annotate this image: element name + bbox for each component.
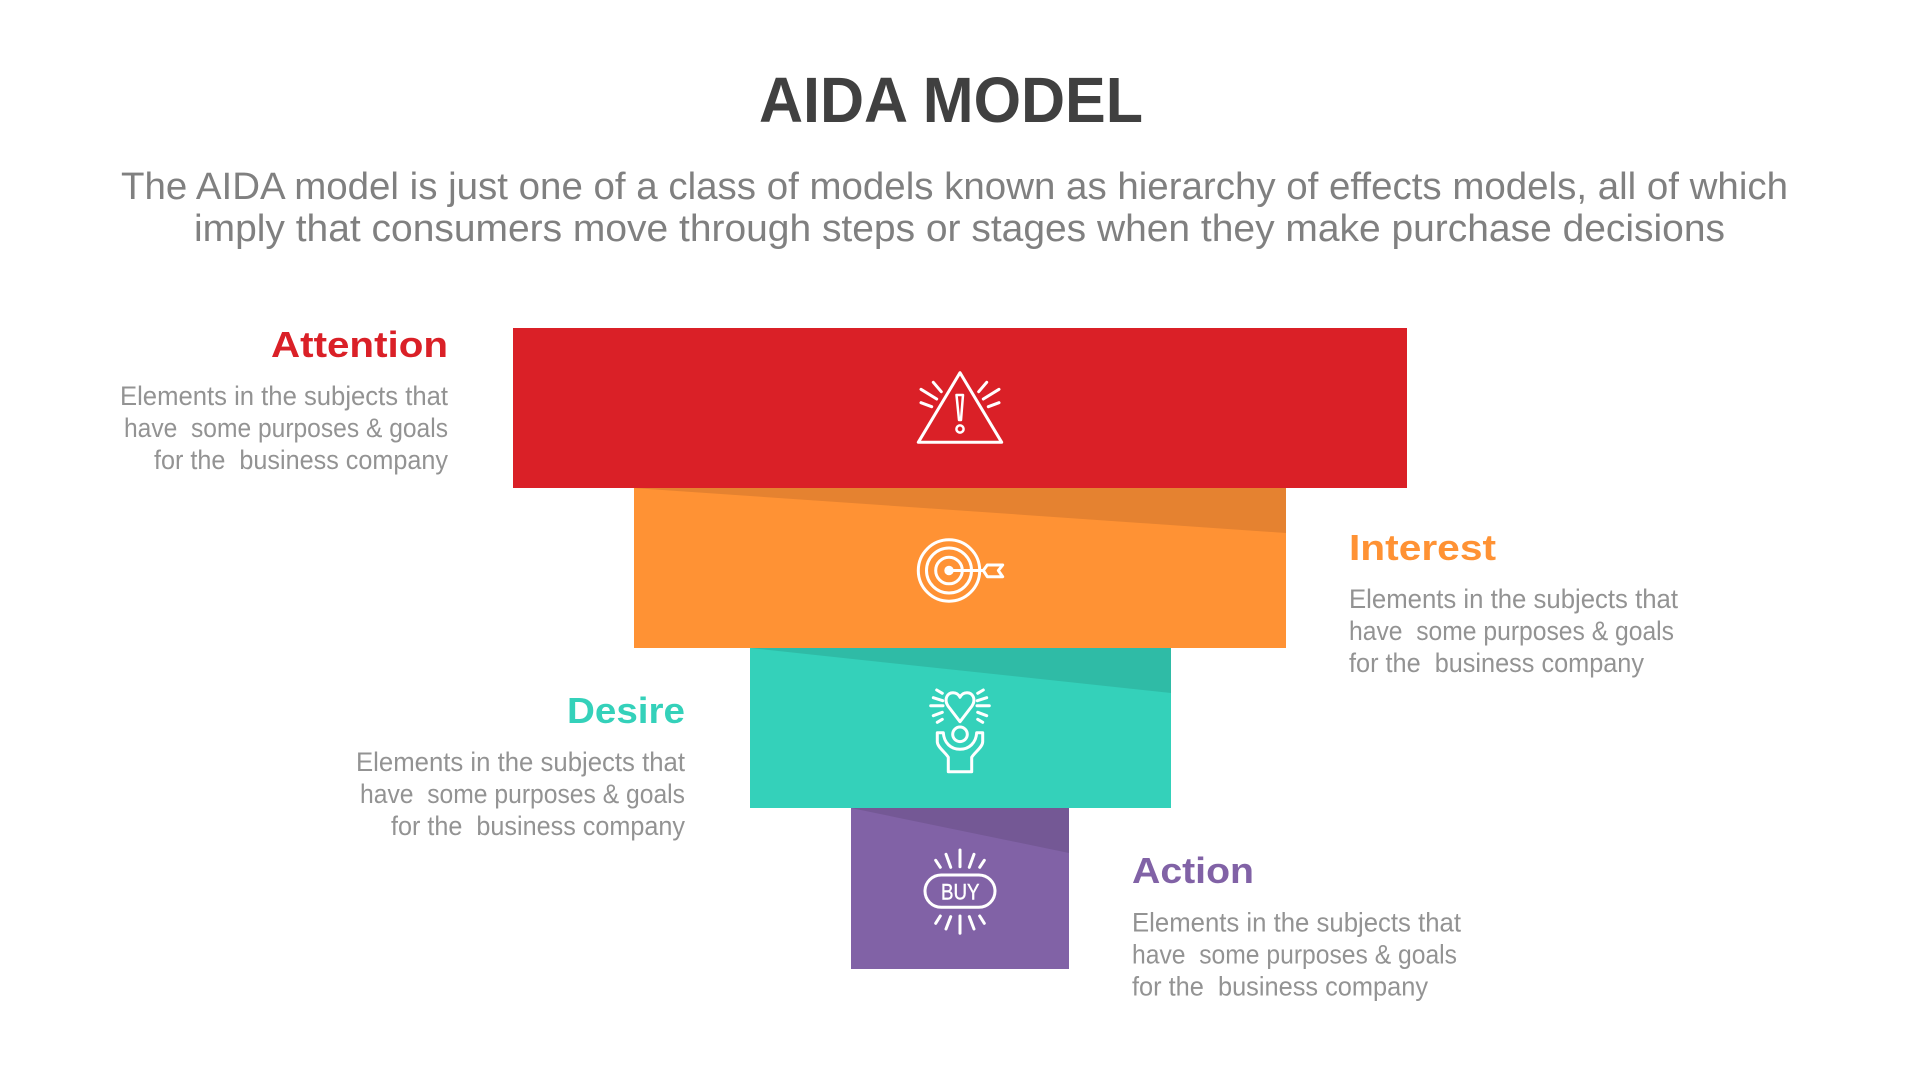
bar: attention	[513, 328, 1407, 488]
text block: desire: for the business company	[391, 811, 685, 841]
text block: attention: Elements in the subjects that	[120, 381, 448, 411]
text block: attention	[120, 324, 448, 475]
icon: person holding heart	[931, 690, 989, 772]
text block: attention: have some purposes & goals	[124, 413, 448, 443]
text block: action	[1132, 850, 1461, 1002]
text block: desire	[356, 690, 685, 841]
title: AIDA MODEL	[759, 64, 1143, 136]
subtitle: The AIDA model is just one of a class of models known as hierarchy of effects models, all of which	[121, 166, 1788, 208]
bar: desire	[750, 648, 1171, 808]
text block: interest: Interest	[1349, 527, 1496, 568]
funnel chart	[513, 328, 1407, 969]
icon: warning triangle	[918, 373, 1002, 442]
text block: desire: Elements in the subjects that	[356, 747, 685, 777]
text block: interest	[1349, 527, 1678, 678]
bar: action	[851, 808, 1069, 969]
text block: action: Action	[1132, 850, 1254, 891]
text block: action: Elements in the subjects that	[1132, 908, 1461, 938]
text block: action: for the business company	[1132, 972, 1428, 1002]
bar: interest	[634, 488, 1286, 648]
subtitle	[121, 166, 1788, 250]
icon: buy button	[925, 850, 995, 933]
text block: attention: for the business company	[154, 445, 448, 475]
text block: desire: Desire	[567, 690, 685, 731]
subtitle: imply that consumers move through steps or stages when they make purchase decisions	[194, 208, 1725, 250]
text block: attention: Attention	[271, 324, 448, 365]
icon: buy button: BUY	[941, 880, 980, 904]
icon: target with arrow	[918, 540, 1003, 601]
text block: interest: Elements in the subjects that	[1349, 584, 1678, 614]
text block: action: have some purposes & goals	[1132, 940, 1457, 970]
text block: desire: have some purposes & goals	[360, 779, 685, 809]
text block: interest: for the business company	[1349, 648, 1644, 678]
text block: interest: have some purposes & goals	[1349, 616, 1674, 646]
